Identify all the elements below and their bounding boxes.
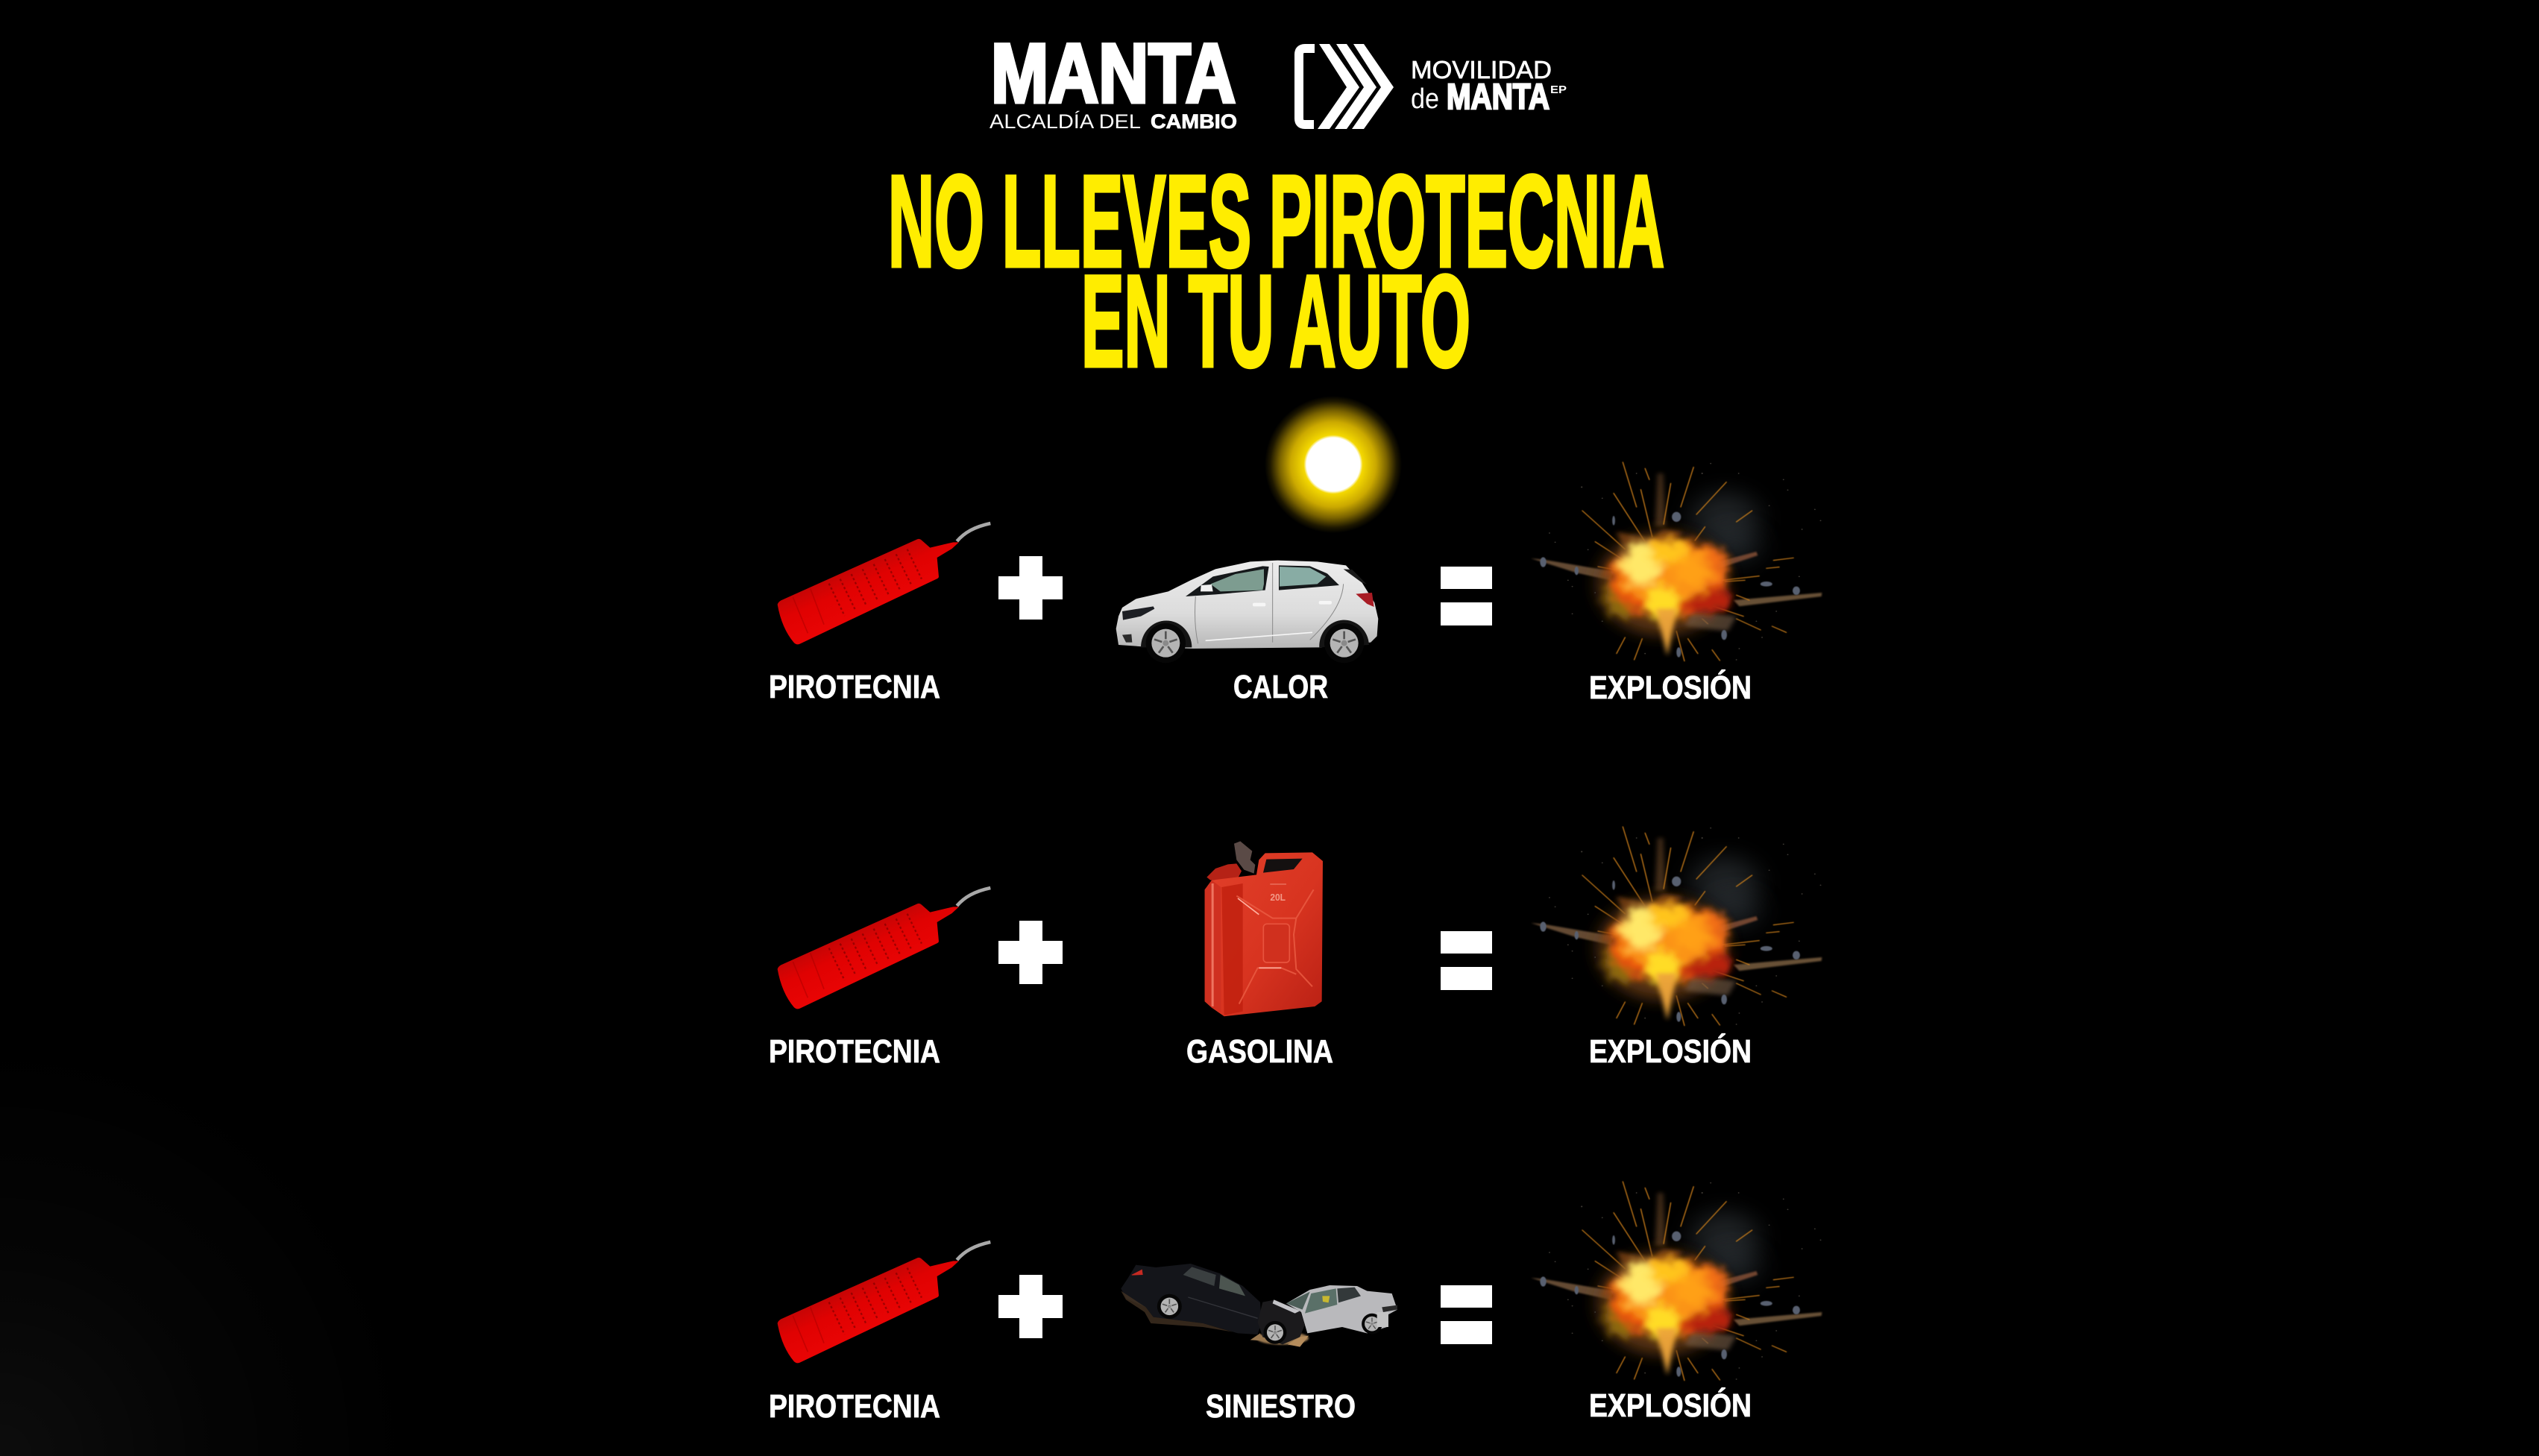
row 2: pirotecnia + gasolina = explosion xyxy=(769,827,1822,1070)
icon: firecracker xyxy=(778,888,990,1009)
icon: plus xyxy=(998,556,1063,620)
text: NO LLEVES PIROTECNIA xyxy=(888,149,1664,294)
label: explosion: EXPLOSIÓN xyxy=(1589,669,1752,706)
icon: plus xyxy=(998,921,1063,984)
logo: Movilidad de Manta EP: MANTA xyxy=(1447,78,1549,117)
icon: firecracker xyxy=(778,1242,990,1363)
label: explosion: EXPLOSIÓN xyxy=(1589,1387,1752,1424)
icon: explosion xyxy=(1531,827,1822,1026)
icon: plus xyxy=(998,1275,1063,1338)
logo: Manta Alcaldia del Cambio: MANTA xyxy=(991,27,1236,120)
icon: equals xyxy=(1441,1285,1492,1344)
label: gasolina: GASOLINA xyxy=(1186,1033,1333,1070)
icon: firecracker xyxy=(778,523,990,644)
label: pirotecnia: PIROTECNIA xyxy=(769,669,940,705)
label: siniestro: SINIESTRO xyxy=(1206,1388,1356,1425)
icon: white car xyxy=(1116,561,1378,663)
row 3: pirotecnia + siniestro = explosion xyxy=(769,1182,1822,1425)
icon: red jerry can xyxy=(1205,841,1323,1016)
logo: Movilidad de Manta EP xyxy=(1299,44,1567,129)
logo: Movilidad de Manta EP: EP xyxy=(1550,83,1567,96)
logo: Movilidad de Manta EP: de xyxy=(1411,83,1439,115)
logo: Manta Alcaldia del Cambio: CAMBIO xyxy=(1151,110,1237,133)
icon: equals xyxy=(1441,567,1492,625)
icon: sun xyxy=(1265,396,1402,533)
logo: Manta Alcaldia del Cambio: ALCALDÍA DEL xyxy=(990,110,1141,133)
icon: equals xyxy=(1441,931,1492,990)
title xyxy=(888,149,1664,394)
label: pirotecnia: PIROTECNIA xyxy=(769,1033,940,1070)
icon: explosion xyxy=(1531,1182,1822,1381)
label: explosion: EXPLOSIÓN xyxy=(1589,1033,1752,1070)
row 1: pirotecnia + calor = explosion xyxy=(769,396,1822,706)
icon: red jerry can: 20L xyxy=(1270,892,1286,903)
label: calor: CALOR xyxy=(1233,669,1328,705)
icon: car crash xyxy=(1121,1264,1397,1347)
logo: Movilidad de Manta EP: MOVILIDAD xyxy=(1411,56,1552,83)
title: EN TU AUTO xyxy=(1081,249,1470,394)
icon: explosion xyxy=(1531,462,1822,661)
label: pirotecnia: PIROTECNIA xyxy=(769,1388,940,1425)
